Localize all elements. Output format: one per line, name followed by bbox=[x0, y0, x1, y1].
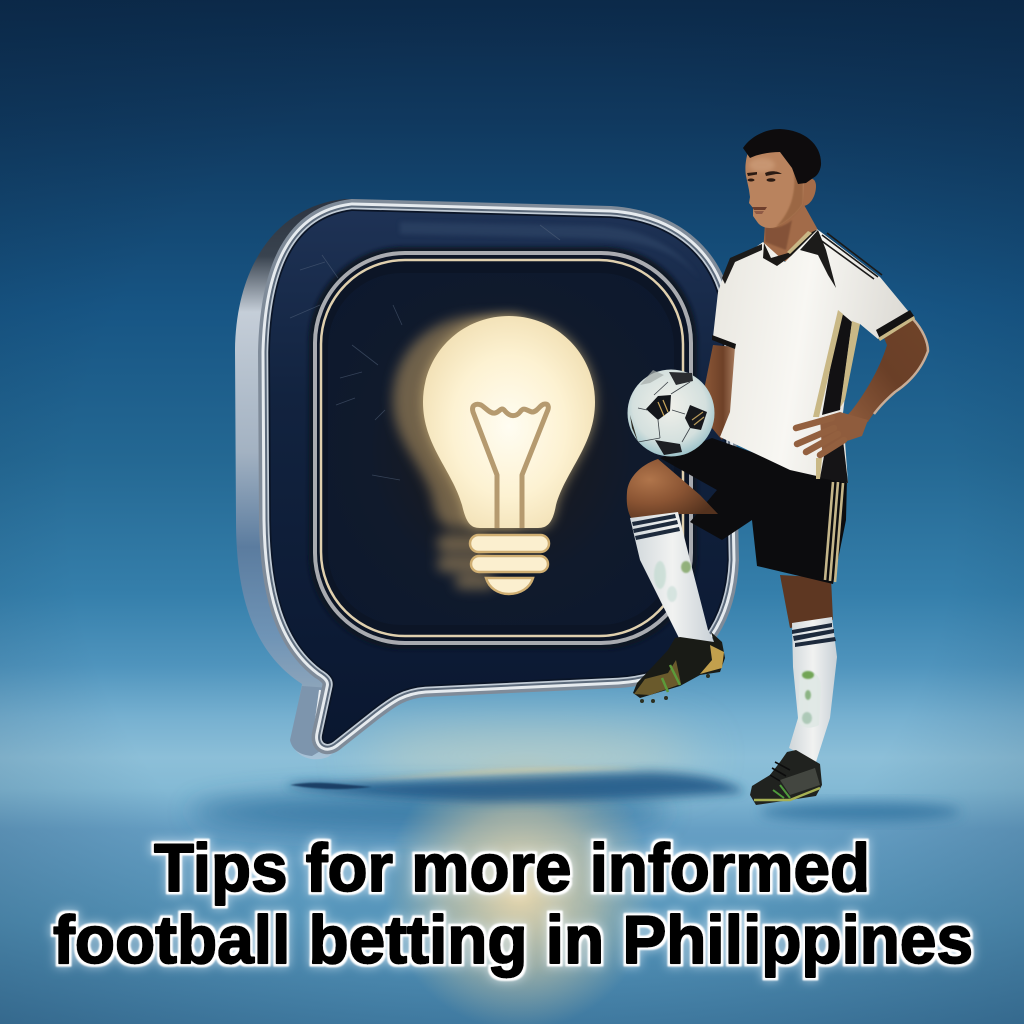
ball bbox=[628, 370, 714, 456]
ear bbox=[802, 178, 816, 206]
standing boot bbox=[750, 750, 822, 805]
inner panel bbox=[328, 273, 674, 625]
neck bbox=[763, 203, 818, 262]
hand bbox=[796, 412, 868, 455]
title line 2: football betting in Philippines bbox=[53, 902, 973, 978]
football player bbox=[627, 129, 928, 805]
jersey side panel bbox=[822, 312, 852, 415]
standing sock bbox=[789, 617, 837, 762]
bubble tail edge bbox=[290, 686, 330, 756]
jersey collar and raglan trim bbox=[763, 229, 818, 266]
facial details bbox=[747, 171, 782, 214]
bubble metal back edge bbox=[235, 199, 736, 759]
sleeve cuffs bbox=[876, 310, 914, 339]
speech bubble with light bulb bbox=[235, 199, 736, 759]
bulb filament bbox=[473, 404, 548, 528]
hair bbox=[743, 129, 821, 184]
title line 1: Tips for more informed bbox=[154, 830, 870, 906]
shorts stripes bbox=[825, 482, 843, 582]
raised thigh bbox=[627, 459, 718, 518]
inner panel rim bbox=[309, 247, 697, 649]
face shading bbox=[776, 172, 803, 227]
jersey bbox=[713, 229, 913, 483]
sock stains bbox=[681, 561, 691, 573]
standing leg bbox=[780, 575, 833, 628]
raised sock bbox=[630, 512, 715, 644]
sock stains standing bbox=[798, 670, 821, 728]
shorts bbox=[660, 438, 847, 584]
bulb glow bbox=[423, 316, 595, 528]
bulb glass bbox=[423, 316, 595, 528]
back arm bbox=[705, 345, 735, 440]
ghost bulb bbox=[393, 316, 520, 589]
raised boot bbox=[633, 632, 725, 698]
floor shadow and glow bbox=[190, 750, 960, 1024]
face bbox=[745, 150, 804, 228]
bubble chrome lip bbox=[270, 211, 727, 742]
bubble highlight bbox=[400, 222, 700, 280]
right arm bbox=[845, 319, 928, 422]
scratches bbox=[290, 225, 560, 480]
bulb base bbox=[470, 535, 549, 594]
bubble front face bbox=[270, 211, 727, 742]
title bbox=[53, 830, 973, 978]
